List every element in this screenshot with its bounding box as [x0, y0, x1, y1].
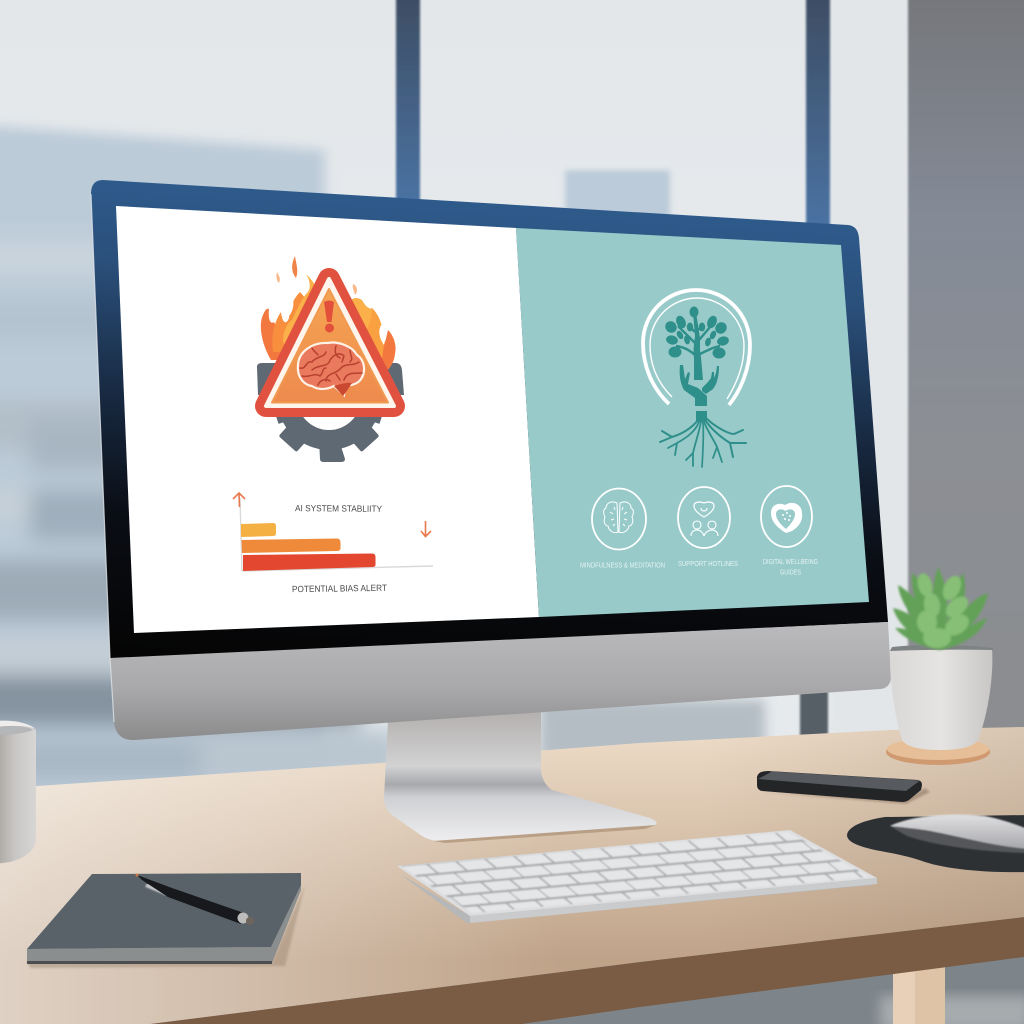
screen: white panel: [116, 206, 539, 633]
monitor bezel: [91, 180, 888, 659]
keyboard: [397, 830, 877, 923]
notebook and pen: [27, 873, 305, 968]
desk top: [0, 727, 1024, 1024]
icon: warning triangle: [266, 279, 394, 406]
icon: heart in a circle: [761, 486, 812, 547]
screen: teal panel: [516, 228, 869, 617]
bar: red: [243, 554, 376, 571]
coaster: [886, 738, 990, 765]
coffee mug: [0, 721, 36, 864]
icon: brain: [298, 343, 364, 396]
mouse pad: [847, 815, 1024, 872]
icon: cupped hands: [680, 365, 719, 406]
monitor stand: [384, 712, 657, 843]
icon: gear: [257, 346, 404, 462]
icon: tree growing from hands inside white arcs: [643, 290, 750, 467]
icon: heart and people in a circle: [678, 487, 730, 548]
chart axes: [240, 498, 433, 571]
pen: [136, 874, 254, 925]
bar: orange: [242, 538, 340, 553]
icon: white arcs: [643, 290, 750, 405]
icon: brain in a circle: [592, 488, 646, 550]
potted succulent: [886, 567, 993, 765]
monitor chin: [110, 622, 891, 740]
chart title: AI SYSTEM STABLIITY: [295, 503, 382, 514]
label: MINDFULNESS & MEDITATION: [580, 562, 665, 570]
label: SUPPORT HOTLINES: [678, 561, 738, 568]
smartphone: [757, 771, 930, 804]
wooden desk: [0, 727, 1024, 1024]
icon: down arrow: [421, 521, 431, 536]
desk leg: [893, 955, 945, 1024]
label: DIGITAL WELLBEING: [763, 559, 818, 566]
icon: flames: [261, 256, 396, 370]
resource: support hotlines: [678, 487, 738, 568]
warning icon: gear, flames, triangle and brain: [257, 256, 404, 462]
notebook: [27, 873, 305, 968]
icon: roots: [660, 411, 746, 467]
wireless mouse: [890, 814, 1024, 853]
resource: digital wellbeing guides: [761, 486, 818, 576]
succulent: [893, 567, 988, 650]
label: [763, 559, 818, 576]
label: GUIDES: [780, 570, 801, 576]
icon: exclamation mark: [324, 300, 334, 332]
bar: yellow: [241, 523, 276, 537]
icon: tree: [663, 306, 730, 380]
bar chart: AI system stability: [233, 493, 433, 594]
monitor: [91, 180, 891, 740]
resource: mindfulness and meditation: [580, 488, 665, 570]
plant pot: [890, 645, 993, 750]
blurred city buildings: [0, 125, 765, 820]
desk front edge: [0, 917, 1024, 1024]
icon: up arrow: [233, 493, 245, 507]
chart caption: POTENTIAL BIAS ALERT: [292, 583, 387, 594]
